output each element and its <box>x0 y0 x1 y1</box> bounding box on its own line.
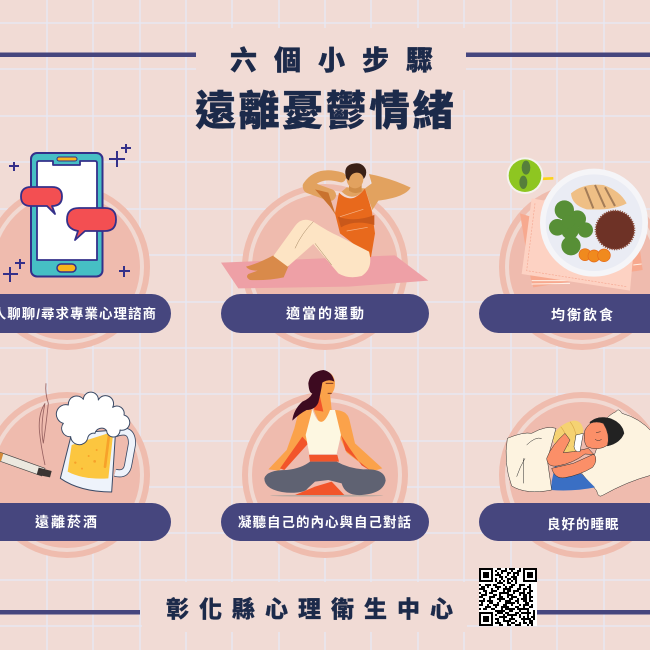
pill label <box>0 503 171 541</box>
illustration: woman doing sit-ups <box>221 163 428 288</box>
illustration: person sleeping <box>506 410 650 496</box>
pill label: 良好的睡眠 <box>547 516 620 532</box>
pill label <box>221 503 429 541</box>
illustration: cigarette and beer mug <box>0 383 132 492</box>
panel: talk to someone <box>0 144 171 350</box>
circle badge <box>242 392 408 558</box>
circle badge <box>499 392 650 558</box>
QR code <box>479 568 537 626</box>
pill label <box>221 294 429 333</box>
circle badge <box>0 392 150 558</box>
pill label <box>479 294 650 333</box>
panel: avoid tobacco and alcohol <box>0 383 171 558</box>
illustration: woman meditating <box>264 370 386 497</box>
pill label: 適當的運動 <box>286 306 366 322</box>
pill label: 均衡飲食 <box>551 307 615 323</box>
panel: good sleep <box>479 392 650 558</box>
header: top rules <box>0 52 650 57</box>
panel: balanced diet <box>479 157 650 350</box>
footer: organization name: 彰化縣心理衛生中心 <box>166 596 463 622</box>
icon: smartphone with chat bubbles <box>3 144 131 282</box>
pill label: 凝聽自己的內心與自己對話 <box>238 514 412 530</box>
footer: bottom rules <box>0 610 650 614</box>
pill label <box>479 503 650 541</box>
heading: six small steps: 六個小步驟 <box>230 46 450 76</box>
circle badge <box>242 184 408 350</box>
illustration: plate of food and green drink <box>507 157 648 291</box>
circle badge <box>0 184 150 350</box>
circle badge <box>499 184 650 350</box>
panel: meditation <box>221 370 429 558</box>
pill label: 遠離菸酒 <box>35 514 99 530</box>
pill label <box>0 294 171 333</box>
title: stay away from depression: 遠離憂鬱情緒 <box>195 88 456 134</box>
panel: moderate exercise <box>221 163 429 350</box>
